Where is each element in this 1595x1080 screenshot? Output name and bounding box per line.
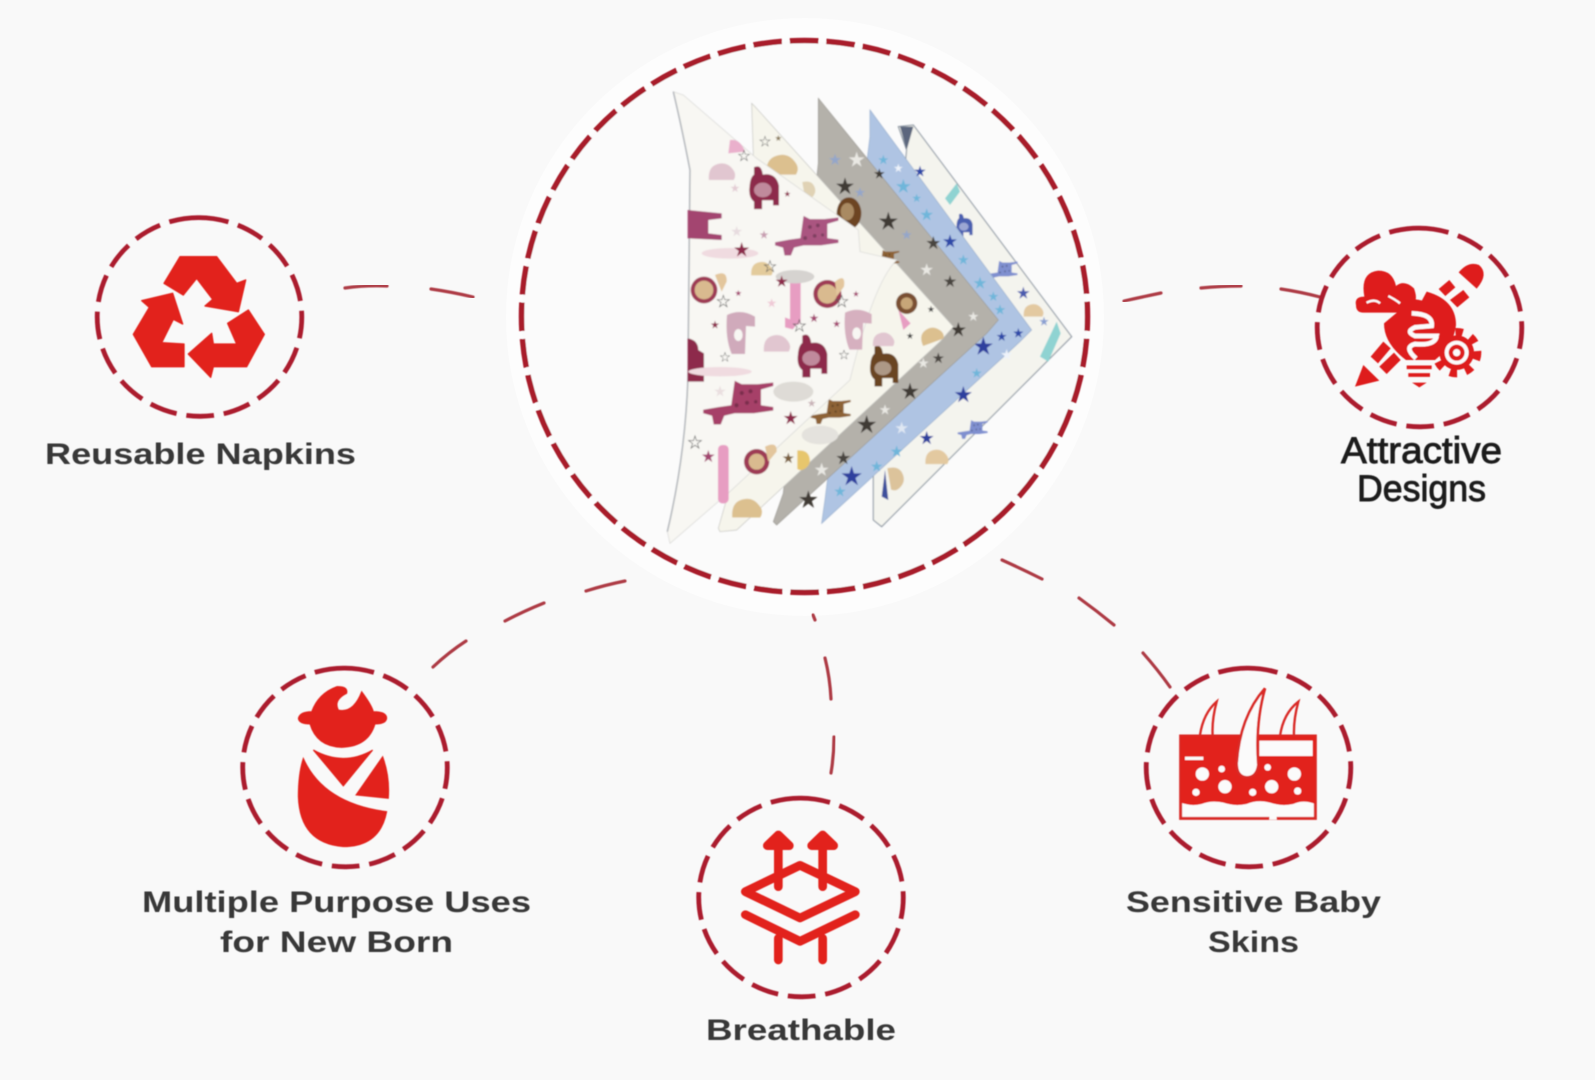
connector: center to Breathable: [813, 615, 834, 773]
crocodiles: [790, 273, 801, 325]
feature: Sensitive Baby Skins: [1126, 668, 1381, 959]
label: Breathable: [706, 1014, 896, 1047]
label: for New Born: [220, 926, 453, 959]
label: [1341, 430, 1502, 509]
label: Skins: [1208, 926, 1299, 959]
label: Multiple Purpose Uses: [142, 886, 531, 919]
connector: center to Attractive Designs: [1124, 286, 1320, 301]
icon: skin layers: [1181, 688, 1315, 820]
feature: Reusable Napkins: [45, 218, 356, 471]
napkin 4: blue with stars: [822, 110, 1032, 523]
label: [1126, 886, 1381, 959]
dashed ring: [1317, 228, 1522, 427]
dashed ring: [699, 798, 903, 997]
feature: Breathable: [699, 798, 903, 1047]
dashed ring: [243, 668, 447, 867]
icon: bulb, pencil and gear: [1355, 264, 1484, 387]
central product circle: [506, 18, 1104, 616]
napkin 3: grey with stars: [773, 98, 998, 525]
pale pink elephants and clouds: [709, 163, 735, 180]
napkin 1: white with pink and maroon print: [667, 92, 911, 543]
label: Designs: [1357, 468, 1486, 509]
dashed ring: [97, 218, 302, 416]
connector: center to Multiple Purpose Uses: [433, 581, 625, 667]
napkin 2: cream with tan print: [718, 103, 953, 532]
dashed ring: [522, 40, 1088, 592]
connector: center to Sensitive Baby Skins: [1002, 560, 1170, 687]
icon: swaddled baby: [298, 687, 389, 847]
soft grey smudges: [773, 382, 813, 402]
feature: Multiple Purpose Uses for New Born: [142, 668, 531, 959]
icon: recycle: [133, 257, 264, 377]
white halo: [506, 18, 1104, 616]
maroon stars: [734, 242, 749, 256]
napkin 5: white with blue print: [873, 125, 1072, 527]
connector: center to Reusable Napkins: [345, 286, 473, 297]
feature: Attractive Designs: [1317, 228, 1522, 509]
napkins photo: [667, 92, 1072, 543]
lions: [691, 277, 717, 303]
icon: breathable fabric with arrows: [745, 835, 855, 960]
label: Attractive: [1341, 430, 1502, 471]
outline stars: [717, 295, 729, 307]
dashed ring: [1146, 668, 1351, 867]
label: Reusable Napkins: [45, 438, 356, 471]
label: Sensitive Baby: [1126, 886, 1381, 919]
label: [142, 886, 531, 959]
brown lion: [837, 197, 861, 229]
